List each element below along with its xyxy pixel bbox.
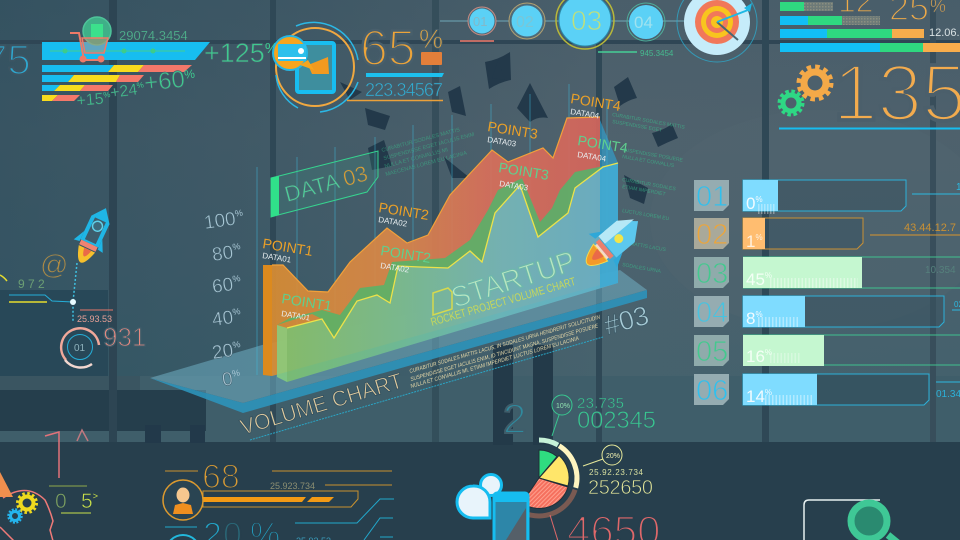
panel: percentage rows <box>694 180 960 407</box>
data 03 tag <box>271 127 475 217</box>
icon: magnifier card <box>804 500 904 540</box>
icon: at sign: @ <box>40 249 68 280</box>
main bar <box>42 42 210 60</box>
y axis labels: % <box>232 273 241 284</box>
point labels: orange series <box>262 90 622 265</box>
startup title: STARTUP <box>447 246 579 315</box>
icon: payment bubble <box>273 36 314 70</box>
point labels: orange series: DATA02 <box>378 215 408 229</box>
icon: tablet ring <box>276 22 358 112</box>
panel: pie chart: 002345 <box>577 407 656 434</box>
panel: top right progress: 12.06. <box>929 27 960 39</box>
step 04 <box>627 3 665 41</box>
row 02 <box>694 218 960 251</box>
value 1 <box>45 432 59 478</box>
flying papers <box>340 52 678 204</box>
step 03 <box>556 0 614 49</box>
point labels: orange series: DATA04 <box>570 107 600 121</box>
row 05 <box>694 335 960 368</box>
faint side notes: CURABITUR SODALES <box>622 177 677 192</box>
row 03: 10.354 <box>925 265 956 276</box>
y axis labels <box>203 208 245 391</box>
panel: shopping growth bars <box>0 17 278 110</box>
step circles <box>440 0 700 58</box>
icon: warning triangle <box>0 472 13 497</box>
y axis labels: % <box>232 306 241 317</box>
step 02 <box>509 3 545 39</box>
chart title <box>237 337 603 440</box>
panel: tablet payment 65%: % <box>419 24 443 54</box>
growth labels: +60 <box>143 66 186 97</box>
faint side notes: SUSPENDISSE EGET <box>612 119 663 134</box>
icon: target <box>677 0 757 62</box>
icon: chart rocket <box>573 204 652 281</box>
icon: rocket <box>66 201 120 269</box>
icon: green badge <box>83 17 111 45</box>
point labels: green series: DATA03 <box>499 179 529 193</box>
point labels: orange series: POINT3 <box>487 118 539 142</box>
small value <box>598 49 674 58</box>
growth labels: +24 <box>109 81 138 102</box>
pie labels: 2: 2 <box>503 395 526 442</box>
row 06: % <box>765 388 772 397</box>
row 02: % <box>755 233 763 242</box>
panel: pie chart: 252650 <box>588 477 653 499</box>
y axis labels: 20 <box>211 340 235 364</box>
growth labels: % <box>265 40 278 57</box>
row 04: 04 <box>696 297 728 329</box>
faint side notes: ETIAM IMPERDIET <box>622 184 666 198</box>
growth labels <box>76 38 278 110</box>
dial 01: 01 <box>74 343 86 354</box>
point labels: green series: POINT3 <box>498 159 550 183</box>
row 05: 05 <box>696 336 728 368</box>
y axis labels: % <box>234 208 243 219</box>
icon: small card <box>421 52 442 65</box>
dial 01 <box>61 328 99 368</box>
icon: blue gear <box>8 510 22 522</box>
icon: head outline <box>0 490 53 540</box>
row 06: 06 <box>696 375 728 407</box>
point labels: green series: DATA04 <box>577 150 607 164</box>
point labels: green series: POINT2 <box>380 242 432 266</box>
step 01 <box>468 7 496 35</box>
row 04: % <box>755 310 763 319</box>
chart front ribbon: green <box>277 163 618 338</box>
faint side notes: NULLA ET CONVALLIS <box>622 154 675 169</box>
values green: 23.735 <box>577 395 624 412</box>
data 03 tag: MAECENAS LOREM EU LACINIA <box>385 150 468 178</box>
row 02: 43.44.12.7 <box>904 222 956 234</box>
panel: bottom left brain <box>0 430 98 540</box>
faint side notes: MATTIS LACUS <box>630 241 667 253</box>
y axis labels: 100 <box>203 209 237 234</box>
faint side notes: CURABITUR SODALES MATTIS <box>612 112 686 131</box>
small value: 945.3454 <box>640 49 674 58</box>
row 01: % <box>755 195 763 204</box>
y axis labels: 40 <box>211 307 235 331</box>
caret <box>77 430 88 441</box>
point labels: green series: DATA02 <box>380 261 410 275</box>
faint side notes: LUCTUS LOREM EU <box>622 208 670 222</box>
icon: orange gear <box>799 67 831 99</box>
rocket path <box>73 263 77 322</box>
chart description text: CURABITUR SODALES MATTIS LACUS, IN SODALES URNA HENDRERIT SOLLICITUDIN <box>409 314 602 375</box>
y axis labels: % <box>232 339 241 350</box>
values 0 and 5: 0 <box>55 490 67 513</box>
10% callout <box>552 395 572 436</box>
y axis labels: 60 <box>211 274 235 298</box>
progress rows <box>780 2 960 52</box>
point labels: orange series: POINT1 <box>262 235 314 259</box>
value 25.93.53: 25.93.53 <box>77 314 112 324</box>
value 25.93.53 <box>77 310 113 324</box>
icon: yellow gear <box>18 494 36 512</box>
panel: pie chart <box>503 395 660 540</box>
value 29074: 29074.3454 <box>119 28 188 43</box>
row 04 <box>694 296 960 329</box>
growth labels: +15 <box>76 91 104 110</box>
chart number: #03 <box>601 300 652 341</box>
growth labels: +125 <box>204 38 265 68</box>
value 65%: 65 <box>360 20 416 76</box>
y axis labels: 0 <box>221 369 234 391</box>
step 03: 03 <box>571 5 602 36</box>
panel: bottom left brain: 5 <box>81 490 93 513</box>
value line blue <box>366 73 444 77</box>
stacked slanted bars <box>42 65 192 101</box>
panel: bottom user progress <box>163 458 394 540</box>
10% callout: 10% <box>556 403 570 410</box>
step 02: 02 <box>516 14 534 31</box>
step 04: 04 <box>634 13 653 32</box>
chart title: VOLUME CHART <box>237 368 405 440</box>
row 05: 16 <box>746 347 765 366</box>
row 05: % <box>765 348 772 357</box>
row 02: 02 <box>696 219 728 251</box>
icon: clouds and phone <box>457 474 528 540</box>
pie wedges <box>520 440 577 516</box>
row 03: % <box>765 271 772 280</box>
connector lines <box>9 295 76 305</box>
data 03 tag: DATA 03 <box>282 161 370 207</box>
icon: shopping cart <box>70 33 108 62</box>
startup title: ROCKET PROJECT VOLUME CHART <box>430 276 577 329</box>
growth labels: % <box>103 90 111 100</box>
icon: green gear <box>780 92 802 114</box>
value 68: 68 <box>202 458 240 496</box>
values yellow: 25.92.23.734 <box>589 468 644 477</box>
20% callout <box>583 445 622 466</box>
panel: left rocket widget <box>0 201 146 368</box>
panel: tablet payment 65% <box>273 20 444 112</box>
point labels: orange series: POINT4 <box>570 90 622 114</box>
row 06: 14 <box>746 387 765 406</box>
row 01: 01 <box>696 181 728 213</box>
point labels: green series: DATA01 <box>281 309 311 323</box>
data 03 tag: NULLA ET CONVALLIS MI <box>384 147 449 170</box>
value 223: 223.34567 <box>365 80 443 100</box>
growth labels: % <box>184 67 196 82</box>
point labels: orange series: DATA03 <box>487 135 517 149</box>
row 03 <box>694 257 960 290</box>
chart: volume chart 3D area <box>150 84 686 440</box>
progress bar <box>203 491 358 507</box>
faint side notes: SUSPENDISSE POSUERE <box>622 147 684 164</box>
data 03 tag: CURABITUR SODALES MATTIS <box>381 127 461 154</box>
faint side notes: SODALES URNA <box>622 262 662 275</box>
step 01: 01 <box>473 14 487 29</box>
chart front area: green to blue <box>277 120 618 382</box>
row 01: 0 <box>746 194 755 213</box>
point labels: green series <box>281 132 629 323</box>
chart description text: SUSPENDISSE EGET IACULIS ENIM, ID TINCIDUNT MAGNA. SUSPENDISSE POSUERE <box>410 323 599 383</box>
value 931: 931 <box>103 322 146 352</box>
faint marks: 9 7 2 <box>18 277 45 291</box>
point labels: orange series: DATA01 <box>262 251 292 265</box>
chart vertical guides <box>257 84 607 375</box>
panel: bottom user progress: 25.923.734 <box>270 481 315 491</box>
row 04: 8 <box>746 309 755 328</box>
y axis labels: 80 <box>211 242 235 266</box>
icon: user avatar <box>163 480 203 520</box>
row 02: 1 <box>746 232 755 251</box>
chart back area: orange/red <box>263 117 600 376</box>
decorative lines <box>165 471 392 485</box>
chart platform <box>150 270 647 413</box>
data 03 tag: SUSPENDISSE EGET IACULIS ENIM <box>383 132 475 162</box>
row 01 <box>694 180 960 213</box>
point labels: green series: POINT4 <box>577 132 629 156</box>
y axis labels: % <box>231 368 241 379</box>
point labels: green series: POINT1 <box>281 290 333 314</box>
20% callout: 20% <box>606 453 620 460</box>
row 03: 03 <box>696 258 728 290</box>
panel: top right progress <box>779 0 960 137</box>
growth labels: % <box>136 80 144 90</box>
row 06 <box>694 374 960 407</box>
chart description text: NULLA ET CONVALLIS MI. ETIAM IMPERDIET LUCTUS LOREM EU LACINIA <box>410 336 580 390</box>
panel: bottom left brain: > <box>93 491 98 501</box>
y axis labels: % <box>232 241 241 252</box>
faint side notes <box>612 112 686 275</box>
blue connector lines <box>295 499 394 540</box>
row 03: 45 <box>746 270 765 289</box>
point labels: orange series: POINT2 <box>378 199 430 223</box>
